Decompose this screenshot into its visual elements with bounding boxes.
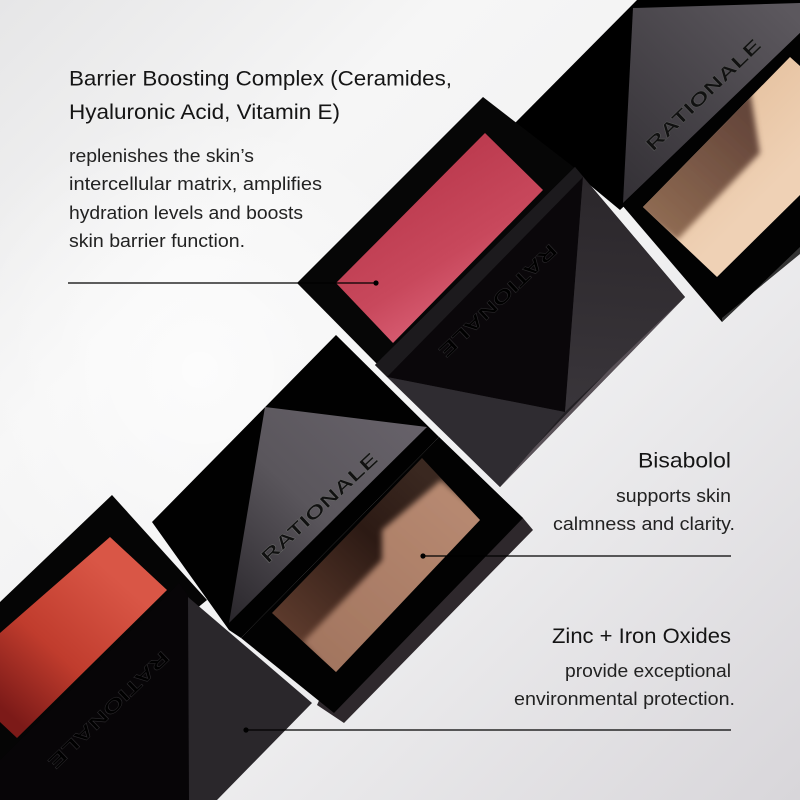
description: [69, 145, 322, 251]
compact: bottom left coral blush: [0, 495, 312, 800]
description: [553, 485, 735, 534]
lid facet: [623, 3, 800, 203]
powder shadow: [630, 90, 760, 240]
lid light facet: [188, 597, 312, 800]
heading: Bisabolol: [638, 450, 731, 472]
brand mark: RATIONALE: [642, 35, 765, 155]
base frame: [622, 33, 800, 322]
lid edge highlight: [500, 296, 685, 487]
side edge: [317, 437, 533, 723]
blush powder: [0, 537, 167, 738]
powder highlight: [643, 57, 800, 277]
heading: Barrier Boosting Complex (Ceramides,: [69, 68, 452, 90]
description: replenishes the skin’s: [69, 145, 254, 166]
heading: [69, 68, 452, 124]
lid grey facet: [229, 407, 427, 623]
lid black facet: [0, 583, 189, 800]
description: skin barrier function.: [69, 230, 245, 251]
heading: Zinc + Iron Oxides: [552, 625, 731, 648]
description: hydration levels and boosts: [69, 202, 303, 223]
lid: [152, 335, 439, 638]
lid hinge rim: [375, 167, 583, 377]
lid: [375, 167, 685, 487]
brand mark: RATIONALE: [435, 240, 561, 361]
callout: bisabolol: [420, 450, 735, 559]
leader line: [243, 727, 731, 733]
lid black facet: [387, 177, 583, 412]
base frame: [241, 437, 523, 713]
description: supports skin: [616, 485, 731, 506]
side edge: [722, 247, 800, 322]
description: calmness and clarity.: [553, 513, 735, 534]
description: [514, 660, 735, 709]
brand mark: RATIONALE: [257, 449, 382, 567]
compact: top right bronzer: [515, 0, 800, 322]
lid lower facet: [387, 377, 565, 487]
lid light facet: [565, 177, 685, 412]
callout: zinc and iron oxides: [243, 625, 735, 733]
powder shadow: [272, 458, 480, 672]
compact: lower bronze: [152, 335, 533, 723]
callout: barrier boosting complex: [68, 68, 452, 286]
leader line: [68, 280, 379, 286]
description: provide exceptional: [565, 660, 731, 681]
heading: Hyaluronic Acid, Vitamin E): [69, 101, 340, 124]
description: environmental protection.: [514, 688, 735, 709]
blush powder: [336, 133, 543, 343]
compact: top pink blush: [297, 97, 685, 487]
brand mark: RATIONALE: [44, 647, 173, 773]
description: intercellular matrix, amplifies: [69, 173, 322, 194]
leader line: [420, 553, 731, 559]
powder highlight: [303, 480, 490, 680]
